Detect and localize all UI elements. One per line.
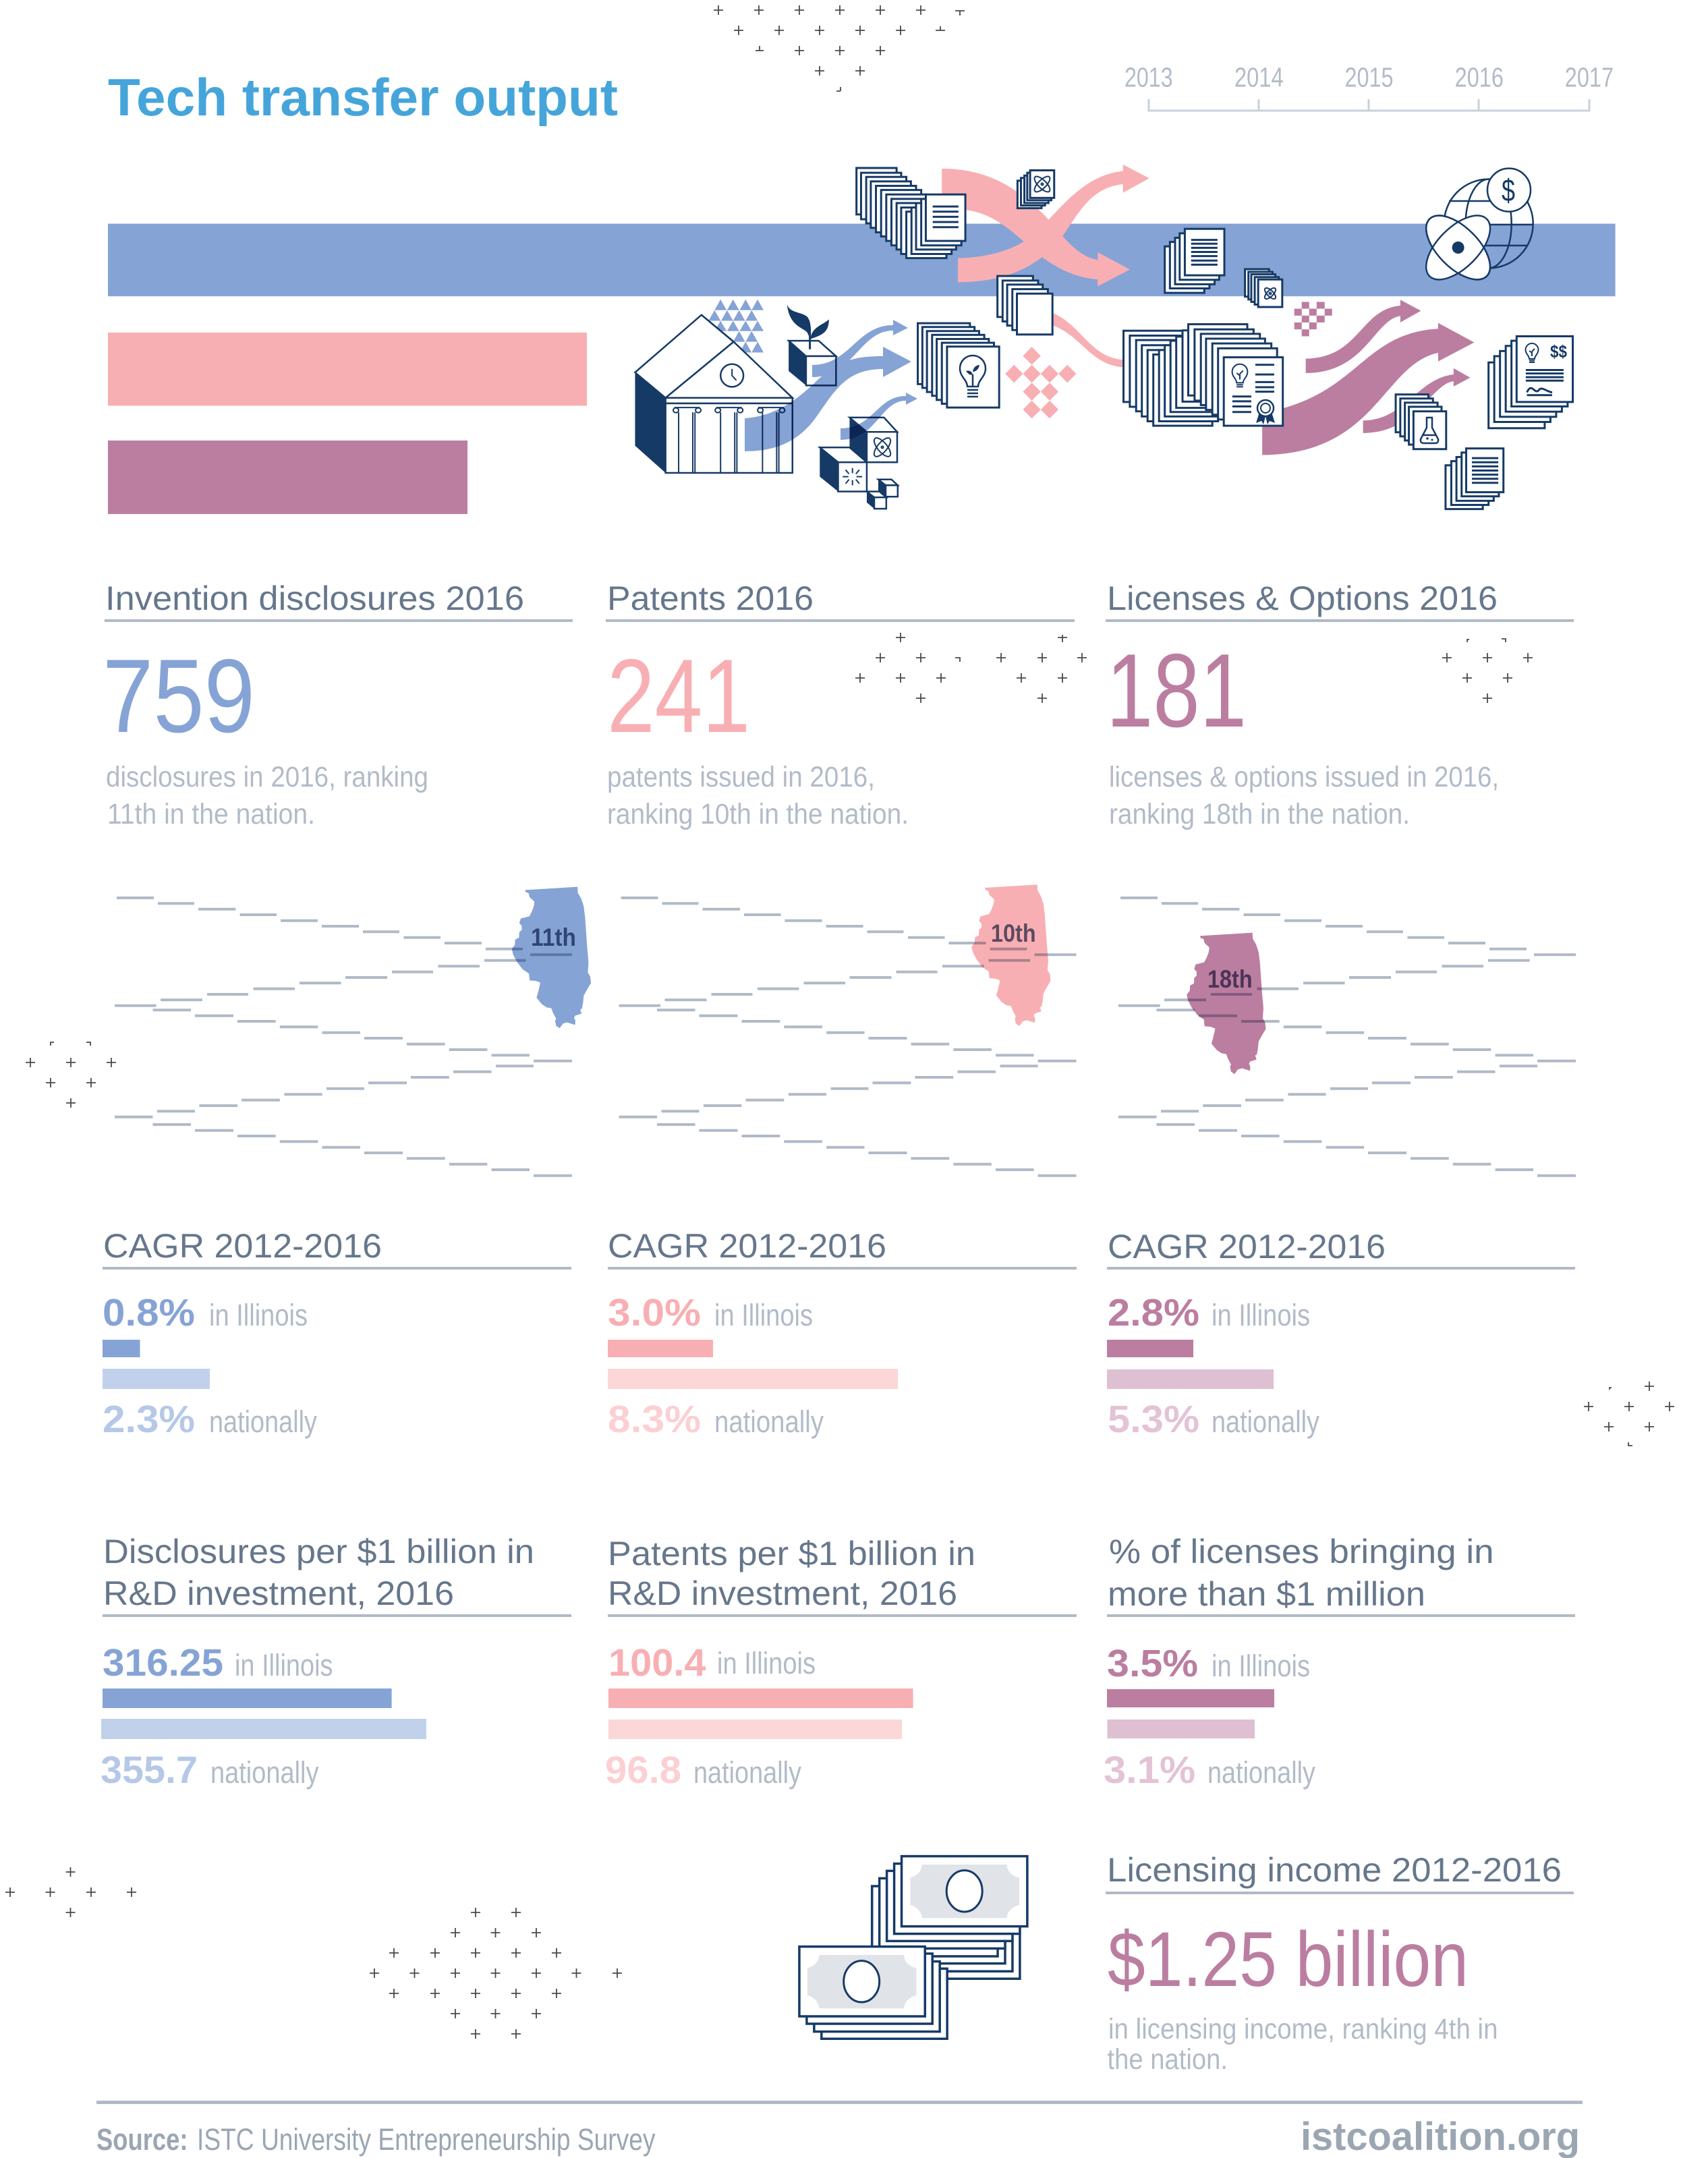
description: the nation. [1108,2043,1228,2076]
heading: CAGR 2012-2016 [103,1227,382,1265]
illustration: plant in box [787,304,836,385]
title: Tech transfer output [108,67,618,127]
timeline axis: 2017 [1565,62,1614,93]
icon: license income document stack: $$ [1550,341,1567,362]
heading [103,1533,534,1612]
stat: Illinois: 2.8% [1108,1291,1199,1334]
decorative cross cluster: top [714,5,965,91]
icon: blank page stack [998,276,1052,335]
heading: Patents 2016 [607,579,814,617]
panel: patents per $1 billion [605,1535,1077,1792]
timeline axis: 2014 [1234,62,1284,93]
description [1109,761,1499,830]
big number: 759 [103,637,255,754]
stat: Illinois: in Illinois [1212,1298,1310,1332]
description [1108,2013,1498,2076]
stat: national: 3.1% [1104,1749,1195,1792]
bar: invention disclosures timeline [108,224,1616,296]
decorative cross cluster: bottom centre [370,1908,622,2039]
pattern: mauve checker [1294,302,1332,336]
stat: national [101,1749,319,1792]
icon: stacks of banknotes [799,1856,1027,2039]
heading: Licensing income 2012-2016 [1107,1851,1562,1889]
stat: national [1108,1398,1319,1441]
bar: national [101,1719,426,1739]
icon: patent certificate stack [1124,324,1283,426]
icon: Illinois pink [971,884,1051,1026]
panel: licenses and options [1106,579,1574,830]
stat: national: nationally [693,1755,801,1790]
arrows: pink crossing flows [942,165,1149,367]
stat: national [103,1398,317,1441]
dashed flow lines [619,898,1077,1176]
panel: CAGR disclosures [103,1227,571,1441]
stat: Illinois: in Illinois [1212,1649,1310,1683]
arrows: blue flows from university [745,320,917,451]
stat: national: 8.3% [608,1398,701,1441]
description [106,761,428,830]
decorative cross cluster: right margin [1584,1382,1674,1446]
icon: document stack, lower right [1446,449,1504,509]
big number: 241 [607,637,750,754]
footer [96,2101,1583,2158]
rank label: 10th [991,919,1036,947]
bar: national [608,1369,898,1389]
stat: Illinois: in Illinois [235,1648,333,1682]
stat: national [608,1398,824,1441]
bar: national [1108,1720,1255,1738]
description: disclosures in 2016, ranking [106,761,428,793]
bar: Illinois [608,1688,913,1708]
illustration: university building [635,315,793,473]
description: ranking 10th in the nation. [607,798,909,830]
decorative cross cluster: bottom left [5,1867,136,1917]
panel: patents [606,579,1075,830]
bar: patents timeline [108,333,587,406]
rank label: 18th [1207,965,1253,993]
stat: national: nationally [714,1404,824,1439]
stat: Illinois: 0.8% [103,1291,195,1334]
stat: Illinois: in Illinois [209,1298,308,1332]
heading: Licenses & Options 2016 [1107,579,1498,617]
heading [608,1535,975,1612]
icon: atom on cube [872,435,893,459]
timeline axis: 2015 [1345,62,1394,93]
stat: national [1104,1749,1315,1792]
description: licenses & options issued in 2016, [1109,761,1499,793]
heading: % of licenses bringing in [1109,1533,1493,1570]
description [607,761,909,830]
icon: invention bulb stack [918,323,999,407]
stat: national: 5.3% [1108,1398,1199,1441]
heading: R&D investment, 2016 [103,1574,454,1612]
bar: national [1107,1369,1274,1389]
bar: Illinois [103,1340,140,1357]
stat: Illinois: 3.5% [1107,1642,1198,1685]
decorative cross cluster: left margin [26,1042,116,1108]
heading: CAGR 2012-2016 [608,1227,886,1265]
stat: national: nationally [1212,1404,1319,1439]
heading [1108,1533,1493,1613]
arrows: mauve flows [1262,300,1474,455]
map: licenses rank [1118,898,1576,1176]
description: patents issued in 2016, [607,761,875,793]
description: in licensing income, ranking 4th in [1108,2013,1498,2045]
stat: national: nationally [210,1755,319,1790]
heading: R&D investment, 2016 [608,1574,957,1612]
heading: more than $1 million [1108,1575,1425,1613]
rank label: 11th [531,924,576,951]
stat: national: nationally [1207,1755,1315,1790]
stat: Illinois: in Illinois [717,1646,816,1680]
big number: 181 [1106,632,1247,749]
source: Source: [96,2122,188,2157]
bar: national [608,1720,902,1739]
website: istcoalition.org [1301,2115,1580,2158]
icon: document stack, disclosures [857,168,965,258]
stat: Illinois [103,1641,333,1684]
icon: license income document stack [1489,336,1573,428]
illustration: triangle pattern [708,300,764,352]
description: ranking 18th in the nation. [1109,798,1410,830]
panel: licenses over $1 million [1104,1533,1575,1792]
icon: globe, coin and atom [1415,169,1533,291]
map: disclosures rank [115,887,591,1176]
icon: globe, coin and atom: $ [1502,173,1515,208]
pattern: pink diamonds [1005,347,1076,418]
decorative cross clusters: stat row [855,633,1533,703]
panel: licensing income [1106,1851,1574,2076]
panel: disclosures per $1 billion [101,1533,571,1792]
stat: Illinois: 3.0% [608,1291,701,1334]
source: ISTC University Entrepreneurship Survey [197,2122,656,2157]
icon: small atom stack on bar [1245,269,1282,307]
bar: Illinois [1107,1340,1193,1357]
stat: Illinois [608,1291,813,1334]
icon: small atom stack [1017,171,1054,208]
bar: Illinois [1107,1689,1274,1707]
stat: Illinois [1107,1642,1310,1685]
icon: Illinois blue [512,887,591,1028]
stat: national: 96.8 [605,1749,681,1792]
icon: flask stack [1396,395,1446,449]
heading: Patents per $1 billion in [608,1535,975,1572]
icon: Illinois mauve [1187,933,1266,1074]
big number: $1.25 billion [1108,1916,1469,2003]
heading: CAGR 2012-2016 [1108,1228,1386,1266]
dashed flow lines [115,898,572,1176]
stat: Illinois [1108,1291,1310,1334]
dashed flow lines [1118,898,1576,1176]
icon: document stack on bar [1165,229,1224,293]
panel: CAGR licenses [1107,1228,1575,1441]
heading: Invention disclosures 2016 [105,579,524,617]
panel: CAGR patents [608,1227,1077,1441]
panel: invention disclosures [103,579,573,830]
bar: Illinois [608,1340,713,1357]
timeline axis: 2013 [1125,62,1173,93]
stat: national: 2.3% [103,1398,195,1441]
bar: national [103,1369,210,1389]
heading: Disclosures per $1 billion in [103,1533,534,1570]
bar: Illinois [103,1688,392,1708]
stat: national [605,1749,801,1792]
stat: Illinois: 100.4 [608,1641,706,1684]
stat: Illinois: 316.25 [103,1641,223,1684]
stat: Illinois: in Illinois [714,1298,813,1332]
stat: Illinois [608,1641,816,1684]
map: patents rank [619,884,1077,1176]
illustration: cubes with atom and spark [820,418,898,509]
source [96,2122,656,2157]
timeline axis: 2016 [1455,62,1504,93]
timeline axis [1125,62,1614,111]
stat: Illinois [103,1291,308,1334]
stat: national: 355.7 [101,1749,198,1792]
bar: licenses timeline [108,441,467,514]
stat: national: nationally [209,1404,317,1439]
description: 11th in the nation. [107,798,315,830]
